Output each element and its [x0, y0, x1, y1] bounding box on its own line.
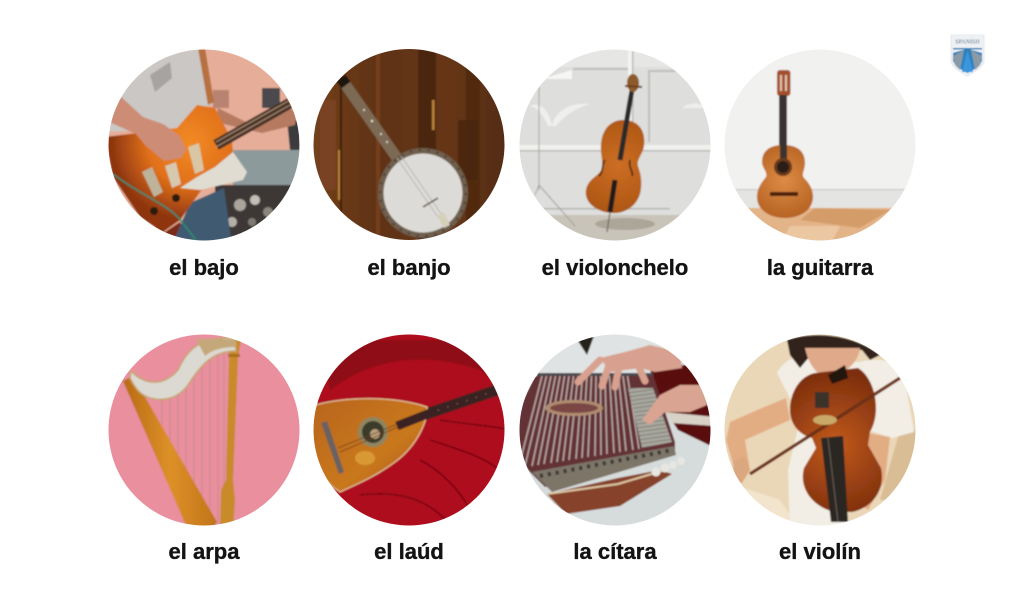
sound hole — [545, 400, 603, 416]
face — [805, 348, 860, 376]
caption: el banjo — [367, 255, 451, 280]
playing arm — [105, 94, 186, 161]
dress and sleeves — [777, 357, 914, 530]
pickguard — [180, 152, 247, 190]
caption: el violín — [779, 539, 861, 564]
shirt — [105, 48, 212, 132]
rim — [378, 148, 468, 238]
neck — [130, 338, 236, 399]
bow — [750, 378, 900, 474]
body — [312, 399, 427, 492]
caption: el bajo — [169, 255, 239, 280]
cello body — [586, 120, 644, 213]
caption: el laúd — [374, 539, 444, 564]
sound box — [123, 376, 217, 530]
photo: classical guitar — [720, 45, 920, 245]
caption: el violonchelo — [542, 255, 688, 280]
tailpiece and endpin — [610, 180, 615, 212]
string board — [518, 375, 675, 487]
far arm — [216, 108, 297, 133]
tailpiece — [815, 392, 829, 408]
guitar body — [105, 105, 233, 232]
left hand — [578, 345, 682, 387]
neck — [345, 84, 397, 158]
photo: child playing violin — [720, 330, 920, 530]
hand — [733, 456, 750, 483]
head — [777, 70, 790, 96]
drum head — [384, 154, 462, 232]
caption: la guitarra — [767, 255, 874, 280]
logo: shield: SPANISH — [955, 40, 980, 46]
fret board — [628, 388, 672, 448]
violin body — [790, 368, 882, 512]
music stand — [535, 86, 575, 226]
chin rest — [828, 365, 848, 384]
caption: el arpa — [169, 539, 240, 564]
rosette — [358, 417, 388, 447]
tuning pins — [532, 446, 676, 492]
photo: electric bass guitar — [105, 45, 305, 245]
photo: banjo on wood — [310, 45, 510, 245]
f-holes — [599, 160, 632, 176]
photo: hands playing a zither — [515, 330, 715, 530]
neck and scroll — [620, 84, 633, 160]
bridge — [321, 421, 344, 474]
wooden base — [547, 470, 672, 514]
cable — [113, 174, 196, 240]
body — [757, 145, 813, 218]
neck — [216, 103, 290, 145]
neck — [426, 384, 498, 420]
shadow under body — [151, 222, 182, 236]
pickups — [142, 167, 163, 197]
fingerboard — [821, 436, 848, 522]
strings — [162, 345, 224, 522]
neck — [779, 95, 787, 150]
column — [220, 340, 241, 530]
jeans — [174, 188, 232, 240]
caption: la cítara — [573, 539, 657, 564]
logo: shield — [951, 35, 984, 76]
photo: cello against a panelled wall — [515, 45, 715, 245]
hair — [787, 335, 880, 368]
photo: lute on red velvet — [310, 330, 510, 530]
photo: harp — [105, 330, 305, 530]
arm — [726, 398, 790, 478]
right hand — [642, 385, 707, 425]
wall panels — [515, 145, 715, 150]
